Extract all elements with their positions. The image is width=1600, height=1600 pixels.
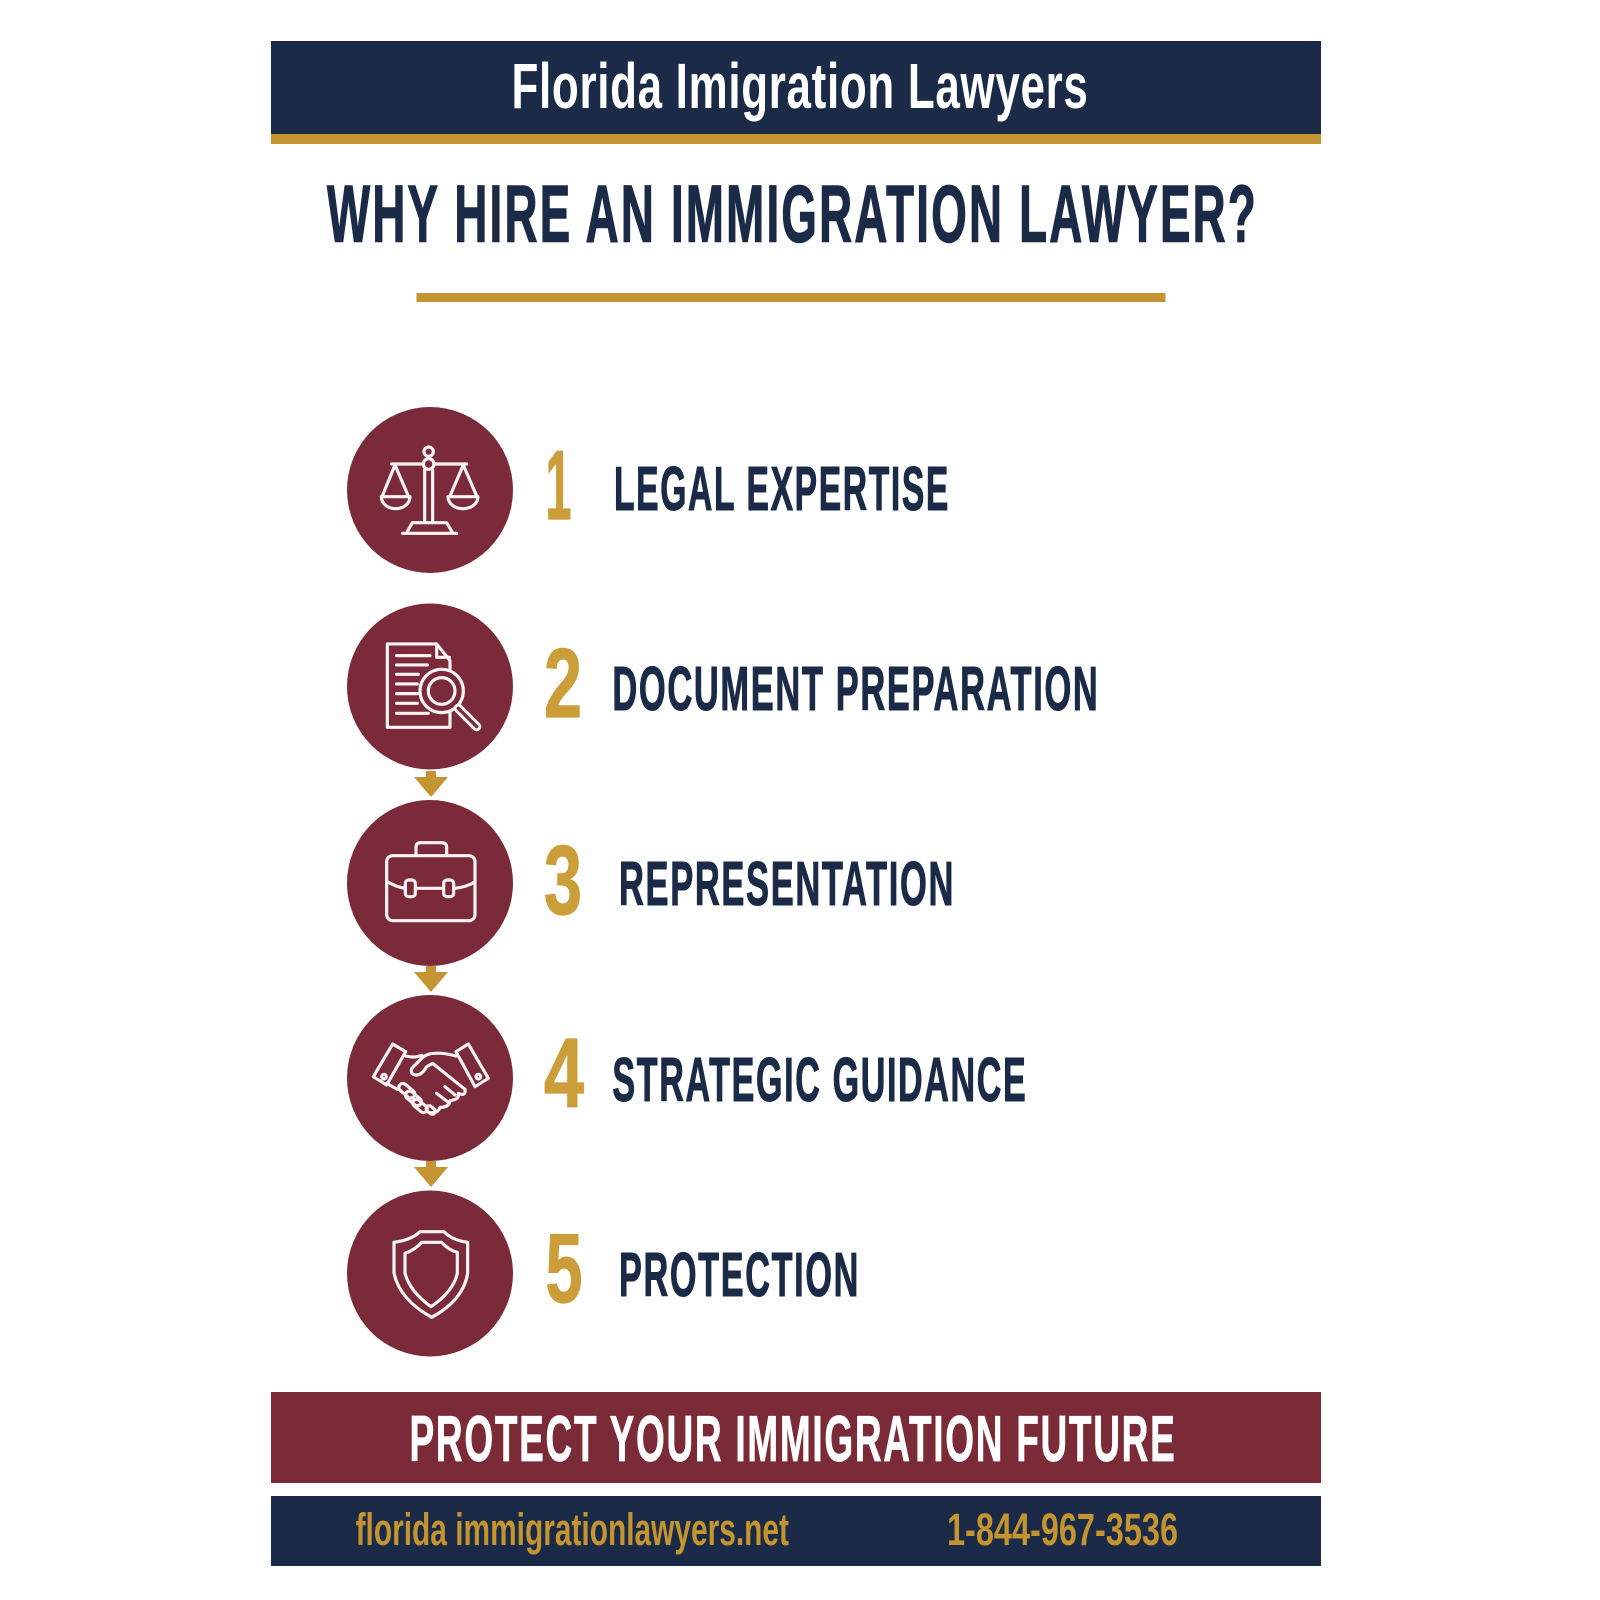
website: florida immigrationlawyers.net (356, 1504, 789, 1555)
number 2: 2 (544, 628, 582, 738)
step 1: legal expertise (347, 407, 950, 573)
call-to-action banner (271, 1392, 1321, 1483)
label: legal expertise: LEGAL EXPERTISE (614, 454, 950, 524)
arrow: step 4 to 5 (414, 1161, 448, 1187)
step 1: legal expertise: 1 (546, 430, 572, 540)
number 4: 4 (544, 1018, 584, 1128)
icon: document with magnifier (347, 604, 513, 770)
step 5: protection (347, 1190, 860, 1356)
icon: scales of justice (347, 407, 513, 573)
label: document preparation: DOCUMENT PREPARATION (612, 654, 1099, 724)
footer contact bar (271, 1496, 1321, 1566)
phone number: 1-844-967-3536 (947, 1504, 1178, 1555)
icon: handshake (347, 995, 513, 1161)
number 5: 5 (546, 1213, 582, 1323)
step 3: representation (347, 800, 955, 966)
step 2: document preparation (347, 604, 1099, 770)
arrow: step 2 to 3 (414, 771, 448, 797)
header title: Florida Imigration Lawyers (512, 50, 1088, 122)
label: strategic guidance: STRATEGIC GUIDANCE (612, 1045, 1027, 1115)
heading underline (416, 293, 1166, 302)
step 4: strategic guidance (347, 995, 1027, 1161)
label: representation: REPRESENTATION (619, 849, 955, 919)
number 3: 3 (544, 825, 582, 935)
arrow: step 3 to 4 (414, 966, 448, 992)
icon: shield (347, 1190, 513, 1356)
icon: briefcase (347, 800, 513, 966)
label: protection: PROTECTION (619, 1240, 860, 1310)
header banner (271, 41, 1321, 144)
